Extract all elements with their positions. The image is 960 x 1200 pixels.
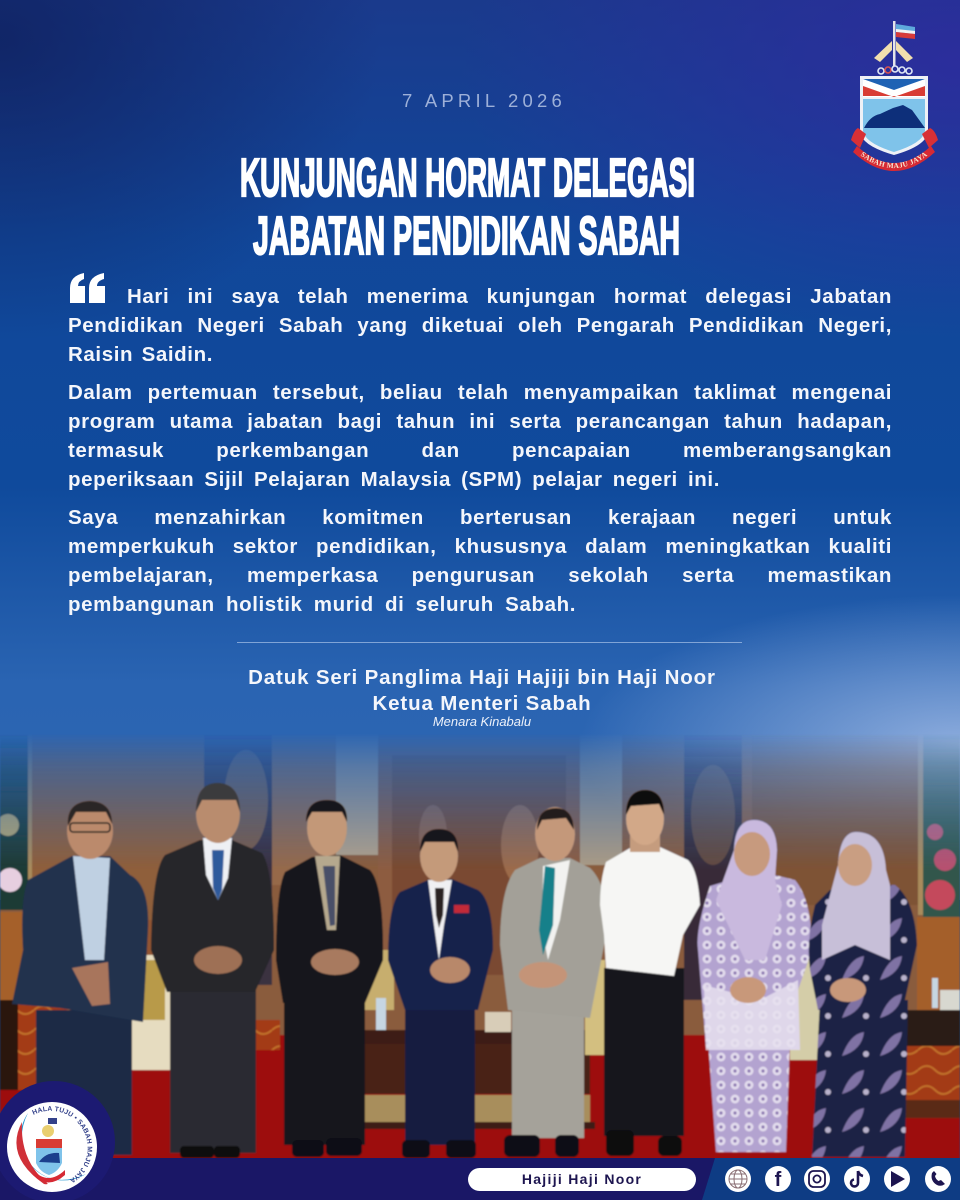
icon: website globe bbox=[725, 1166, 751, 1192]
paragraph 1 bbox=[68, 285, 892, 366]
paragraph 3: pembelajaran, memperkasa pengurusan sekolah serta memastikan bbox=[68, 564, 892, 587]
social icons row bbox=[725, 1166, 951, 1192]
icon: tiktok bbox=[844, 1166, 870, 1192]
person 2 bbox=[151, 783, 274, 1158]
signature block bbox=[248, 666, 716, 729]
icon: facebook: f bbox=[775, 1169, 782, 1191]
name pill: Hajiji Haji Noor bbox=[522, 1171, 642, 1187]
paragraph 3: Saya menzahirkan komitmen berterusan kerajaan negeri untuk bbox=[68, 506, 892, 529]
person 7 bbox=[698, 820, 812, 1152]
paragraph 2: Dalam pertemuan tersebut, beliau telah menyampaikan taklimat mengenai bbox=[68, 381, 892, 404]
paragraph 2: termasuk perkembangan dan pencapaian memberangsangkan bbox=[68, 439, 892, 462]
paragraph 2: peperiksaan Sijil Pelajaran Malaysia (SPM) pelajar negeri ini. bbox=[68, 468, 720, 491]
paragraph 2 bbox=[68, 381, 892, 491]
photo room: floor, carpet and furniture bbox=[0, 950, 960, 1160]
paragraph 1: Raisin Saidin. bbox=[68, 343, 213, 366]
circular badge: HALA TUJU • SABAH MAJU JAYA bbox=[32, 1106, 92, 1182]
person 3 bbox=[276, 800, 383, 1157]
name pill bbox=[468, 1168, 696, 1191]
photo room: walls, panels and paintings bbox=[0, 735, 960, 1065]
person 1 bbox=[12, 801, 148, 1155]
person 6 bbox=[600, 790, 700, 1156]
date: 7 APRIL 2026 bbox=[402, 90, 566, 111]
paragraph 3: memperkukuh sektor pendidikan, khususnya dalam meningkatkan kualiti bbox=[68, 535, 892, 558]
crest: Sabah coat of arms: SABAH MAJU JAYA bbox=[860, 152, 928, 168]
paragraph 1: Pendidikan Negeri Sabah yang diketuai oleh Pengarah Pendidikan Negeri, bbox=[68, 314, 892, 337]
person 8 bbox=[809, 832, 917, 1157]
signatory name: Datuk Seri Panglima Haji Hajiji bin Haji Noor bbox=[248, 666, 716, 689]
icon: phone bbox=[925, 1166, 951, 1192]
group photo bbox=[0, 736, 960, 1158]
icon: instagram bbox=[804, 1166, 830, 1192]
icon: quotation mark bbox=[70, 273, 105, 303]
location: Menara Kinabalu bbox=[433, 714, 531, 729]
paragraph 3 bbox=[68, 506, 892, 616]
background gradient bbox=[0, 0, 960, 900]
person 4 bbox=[388, 829, 493, 1158]
person 5 bbox=[500, 807, 607, 1157]
icon: facebook bbox=[765, 1166, 791, 1192]
icon: youtube play bbox=[884, 1166, 910, 1192]
paragraph 3: pembangunan holistik murid di seluruh Sabah. bbox=[68, 593, 576, 616]
paragraph 2: program utama jabatan bagi tahun ini serta perancangan tahun hadapan, bbox=[68, 410, 892, 433]
crest: Sabah coat of arms bbox=[851, 21, 938, 171]
circular badge bbox=[0, 1081, 115, 1200]
title bbox=[240, 148, 695, 266]
signatory role: Ketua Menteri Sabah bbox=[373, 692, 591, 715]
footer bar bbox=[0, 1158, 960, 1200]
paragraph 1: Hari ini saya telah menerima kunjungan hormat delegasi Jabatan bbox=[127, 285, 892, 308]
